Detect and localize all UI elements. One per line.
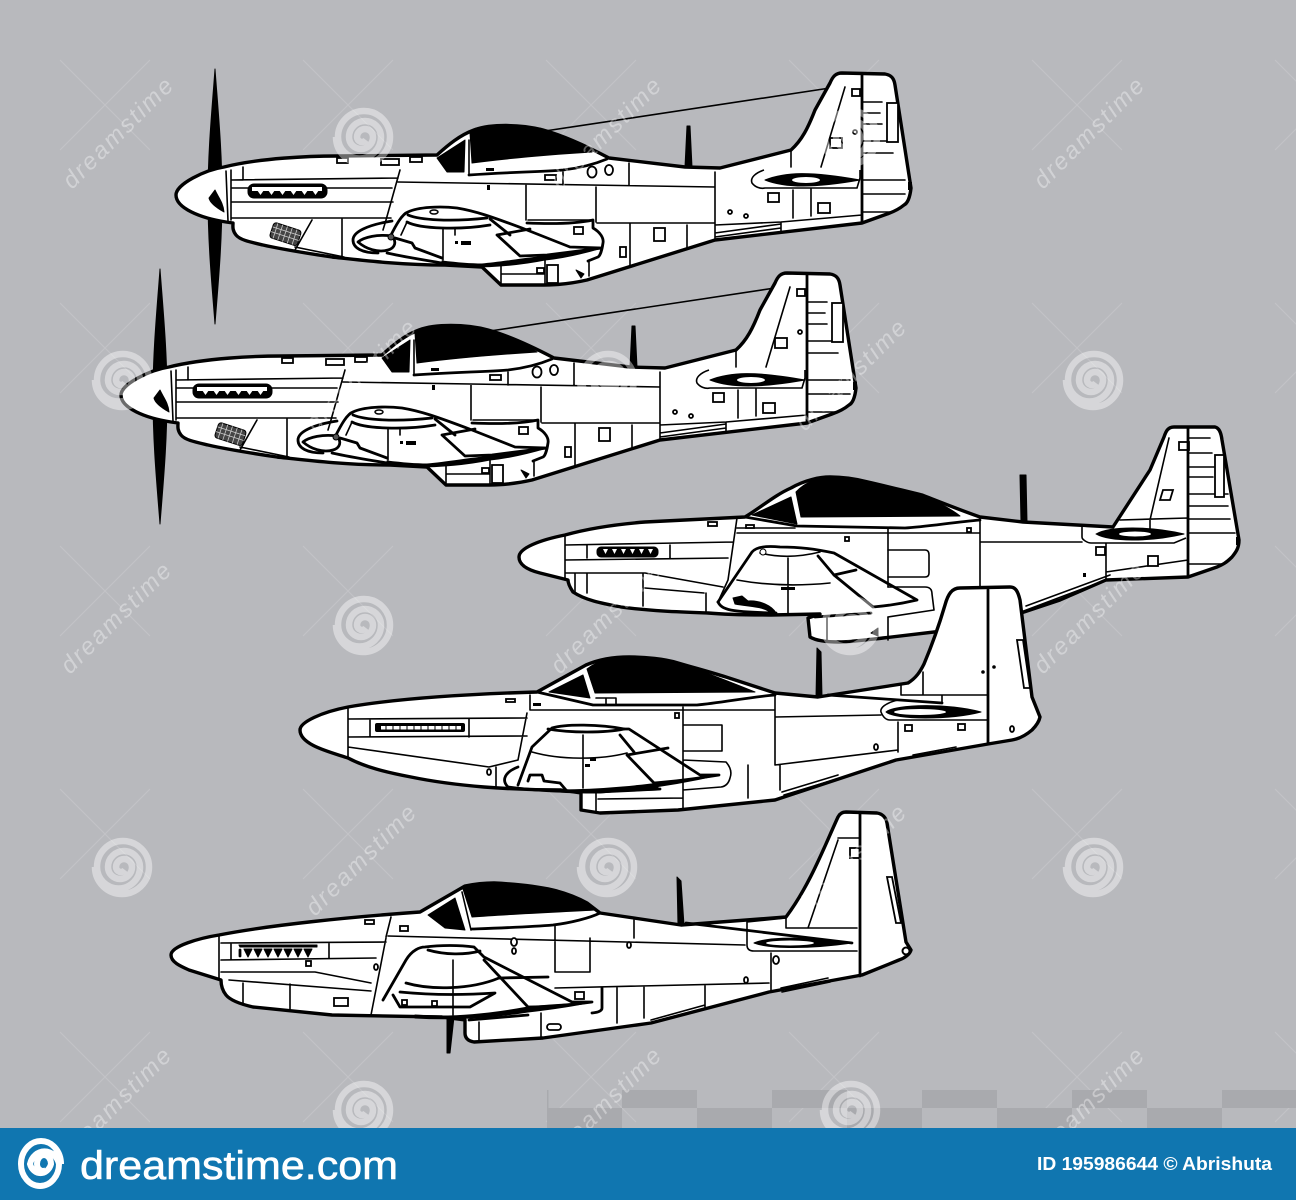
wing	[718, 547, 934, 617]
watermark words: dreamstime	[545, 1043, 667, 1164]
root nacelle tip	[358, 235, 395, 251]
panel lines	[565, 438, 1235, 640]
cockpit canopy	[463, 883, 596, 917]
pitot tube	[447, 1017, 454, 1053]
footer brand name: dreamstime.com	[80, 1144, 398, 1188]
aircraft 5: bottom variant	[171, 812, 911, 1053]
watermark words: dreamstime	[300, 315, 422, 436]
cockpit canopy	[470, 126, 592, 163]
air intake grille	[269, 222, 302, 246]
canopy sill	[472, 913, 600, 929]
wing with root fairing	[353, 207, 603, 267]
wing	[383, 946, 602, 1020]
windshield	[752, 497, 797, 524]
antenna mast	[677, 877, 684, 925]
wing	[505, 725, 719, 793]
footer logo spiral	[21, 1141, 61, 1186]
watermark words: dreamstime	[1028, 73, 1150, 194]
fuselage outline	[171, 812, 911, 1042]
tailplane fairing	[1082, 527, 1186, 543]
left fairing ring	[353, 221, 392, 253]
wing planform	[390, 207, 602, 256]
access hatches	[306, 848, 910, 1030]
access hatches	[337, 89, 912, 283]
fuselage outline	[176, 73, 911, 285]
tail fillet line	[686, 923, 852, 943]
panel lines	[348, 672, 988, 811]
access hatches	[487, 640, 1030, 775]
tailplane fairing	[881, 700, 988, 720]
watermark words: dreamstime	[57, 73, 179, 194]
exhaust stacks	[239, 945, 317, 957]
watermark words: dreamstime	[790, 800, 912, 921]
aircraft 1: side view with propeller	[176, 69, 912, 324]
elevator	[1096, 528, 1184, 540]
propeller 1	[208, 69, 222, 324]
watermark words: dreamstime	[545, 73, 667, 194]
wing trailing black wedge	[442, 248, 602, 267]
exhaust stacks	[248, 184, 327, 198]
exhaust stacks	[375, 723, 465, 732]
exhaust stacks	[597, 547, 658, 557]
tail fillet line	[828, 695, 942, 703]
antenna mast	[1020, 475, 1027, 522]
canopy sill	[537, 692, 775, 705]
canopy sill	[745, 517, 980, 528]
watermark words: dreamstime	[790, 315, 912, 436]
cockpit canopy	[587, 657, 755, 693]
fuselage outline	[300, 587, 1040, 813]
access hatches	[708, 442, 1240, 636]
watermark words: dreamstime	[1028, 558, 1150, 679]
aircraft 2: copy of aircraft 1 shifted	[121, 269, 857, 524]
watermark words: dreamstime	[300, 800, 422, 921]
wing marks	[455, 241, 458, 244]
tailplane fairing	[752, 170, 860, 188]
right fairing	[527, 220, 603, 261]
rudder hinge	[859, 813, 861, 976]
canopy sill	[469, 159, 607, 175]
wing step line	[395, 238, 442, 258]
rudder hinge	[987, 590, 989, 744]
watermark words: dreamstime	[545, 558, 667, 679]
footer image id: ID 195986644 © Abrishuta	[1037, 1154, 1273, 1174]
watermark words: dreamstime	[55, 1043, 177, 1164]
watermark words: dreamstime	[55, 558, 177, 679]
footer bar	[0, 1128, 1296, 1200]
panel lines	[226, 87, 905, 285]
rudder hinge	[1187, 428, 1189, 577]
elevator	[754, 938, 852, 948]
watermark words	[55, 73, 1150, 1164]
rudder hinge	[861, 75, 863, 223]
panel lines	[219, 838, 860, 1040]
elevator	[886, 706, 981, 718]
aircraft 3: no propeller	[519, 427, 1240, 642]
windshield	[437, 140, 465, 172]
elevator	[765, 174, 860, 186]
watermark spirals	[95, 111, 1120, 1137]
checkered scale strip	[547, 1090, 1296, 1128]
antenna mast	[816, 648, 822, 697]
radio antenna wire	[545, 88, 830, 131]
aircraft 4: no propeller, long nose	[300, 587, 1040, 813]
fuselage outline	[519, 427, 1239, 642]
antenna mast	[685, 126, 692, 167]
watermark words: dreamstime	[1028, 1043, 1150, 1164]
windshield	[428, 898, 465, 930]
windshield	[549, 675, 590, 698]
spinner root	[209, 190, 224, 212]
cockpit canopy	[796, 477, 960, 517]
